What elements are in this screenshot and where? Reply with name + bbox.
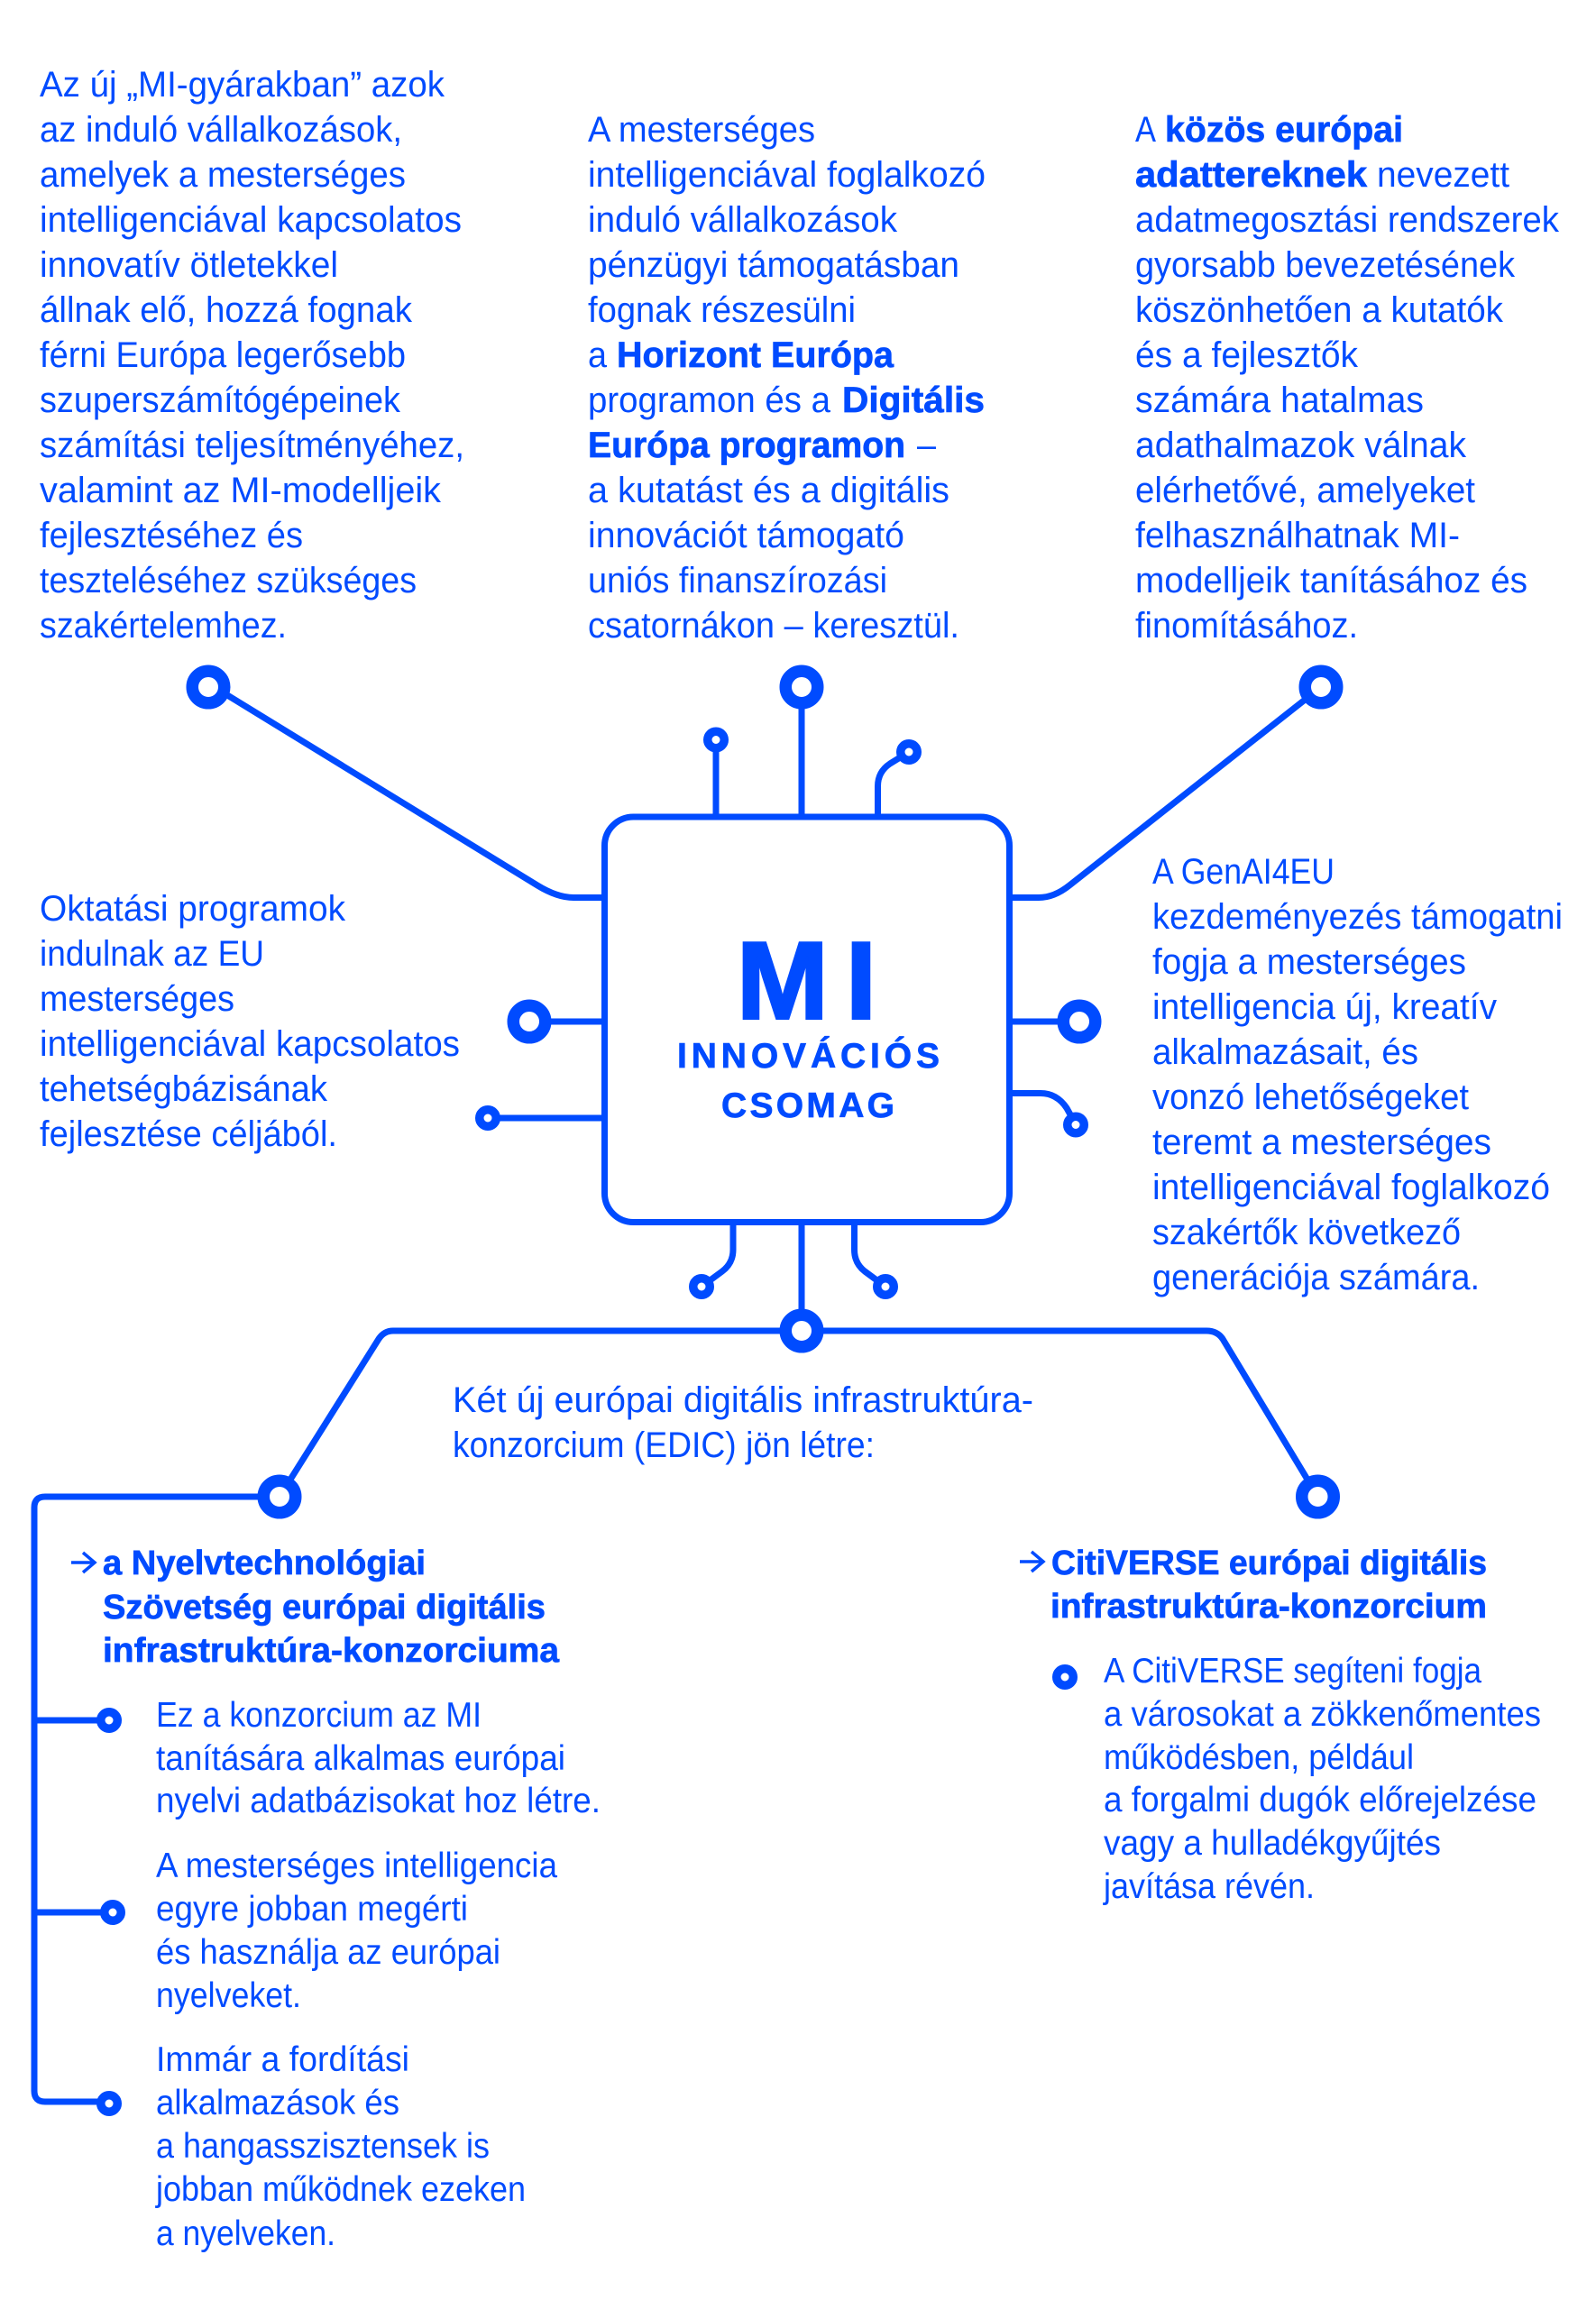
text block: funding for start-ups: a kutatást és a digitális <box>588 471 949 510</box>
text block: common European data spaces: számára hatalmas <box>1135 380 1424 420</box>
text block: education programmes: indulnak az EU <box>40 934 264 974</box>
text: CitiVERSE description: a forgalmi dugók előrejelzése <box>1104 1781 1536 1819</box>
text: CitiVERSE description <box>1103 1652 1541 1906</box>
text block: funding for start-ups <box>588 110 986 646</box>
text: language databases: Ez a konzorcium az MI <box>156 1696 482 1735</box>
circuit traces around the chip <box>208 683 1321 1331</box>
text block: education programmes: tehetségbázisának <box>40 1069 328 1109</box>
text block: funding for start-ups: a <box>588 335 608 375</box>
text block: common European data spaces: adattereknek <box>1135 155 1368 195</box>
text block: EDIC intro: Két új európai digitális infrastruktúra- <box>453 1380 1033 1420</box>
text: translation apps: a nyelveken. <box>156 2214 335 2253</box>
text block: common European data spaces: adatmegosztási rendszerek <box>1135 200 1560 240</box>
heading <box>1050 1544 1487 1626</box>
text: language databases: tanítására alkalmas európai <box>156 1739 565 1778</box>
text block: common European data spaces: elérhetővé, amelyeket <box>1135 471 1475 510</box>
text block: common European data spaces: felhasználhatnak MI- <box>1135 516 1460 555</box>
text: translation apps: alkalmazások és <box>156 2084 399 2122</box>
text: AI understands languages: és használja az európai <box>156 1933 500 1972</box>
text block: GenAI4EU: vonzó lehetőségeket <box>1152 1077 1469 1117</box>
text block: MI factories: Az új „MI-gyárakban” azok <box>40 65 445 105</box>
icon: arrow <box>1020 1552 1043 1572</box>
text block: funding for start-ups: – <box>917 426 937 465</box>
chip title: MI innovációs csomag: CSOMAG <box>721 1086 894 1125</box>
text: CitiVERSE description: a városokat a zökkenőmentes <box>1104 1695 1541 1734</box>
text: translation apps: jobban működnek ezeken <box>155 2170 526 2209</box>
text block: funding for start-ups: intelligenciával foglalkozó <box>588 155 986 195</box>
text block: common European data spaces: gyorsabb bevezetésének <box>1135 245 1516 285</box>
text block: GenAI4EU: szakértők következő <box>1152 1213 1461 1252</box>
text: CitiVERSE description: A CitiVERSE segíteni fogja <box>1104 1652 1482 1691</box>
text block: MI factories: férni Európa legerősebb <box>40 335 406 375</box>
text: CitiVERSE description: vagy a hulladékgyűjtés <box>1104 1824 1441 1863</box>
text block: funding for start-ups: fognak részesülni <box>588 290 856 330</box>
text block: education programmes: Oktatási programok <box>40 889 346 929</box>
panel: CitiVERSE consortium <box>1020 1544 1541 1906</box>
text block: education programmes <box>40 889 460 1154</box>
text block: funding for start-ups: A mesterséges <box>588 110 815 150</box>
text: AI understands languages <box>156 1847 558 2015</box>
text block: funding for start-ups: uniós finanszírozási <box>588 561 887 600</box>
text block: funding for start-ups: Digitális <box>842 380 985 420</box>
text block: GenAI4EU: intelligencia új, kreatív <box>1152 987 1497 1027</box>
text block: GenAI4EU: fogja a mesterséges <box>1152 942 1466 982</box>
text: translation apps <box>155 2040 526 2253</box>
text: AI understands languages: nyelveket. <box>156 1976 301 2015</box>
text: AI understands languages: A mesterséges intelligencia <box>156 1847 558 1885</box>
connector nodes: large <box>192 671 1337 1513</box>
chip title: MI innovációs csomag: INNOVÁCIÓS <box>677 1036 940 1076</box>
text block: GenAI4EU: alkalmazásait, és <box>1152 1032 1418 1072</box>
text: translation apps: Immár a fordítási <box>156 2040 409 2079</box>
text block: common European data spaces: adathalmazok válnak <box>1135 426 1467 465</box>
text block: funding for start-ups: Európa programon <box>588 426 905 465</box>
text block: common European data spaces: köszönhetően a kutatók <box>1135 290 1504 330</box>
heading: a Nyelvtechnológiai <box>103 1544 426 1582</box>
text block: GenAI4EU: A GenAI4EU <box>1152 852 1335 892</box>
text block: MI factories: amelyek a mesterséges <box>40 155 406 195</box>
chip frame <box>604 817 1010 1223</box>
text block: funding for start-ups: induló vállalkozások <box>588 200 898 240</box>
text: CitiVERSE description: javítása révén. <box>1103 1867 1315 1906</box>
text block: GenAI4EU: intelligenciával foglalkozó <box>1152 1168 1550 1207</box>
text block: funding for start-ups: pénzügyi támogatásban <box>588 245 959 285</box>
text block: MI factories: szakértelemhez. <box>40 606 287 646</box>
chip title: MI innovációs csomag: I <box>846 920 876 1042</box>
heading <box>103 1544 560 1670</box>
text block: common European data spaces: A <box>1135 110 1156 150</box>
text: AI understands languages: egyre jobban megérti <box>156 1890 468 1929</box>
text block: MI factories <box>40 65 464 646</box>
text block: MI factories: teszteléséhez szükséges <box>40 561 417 600</box>
heading: infrastruktúra-konzorcium <box>1050 1588 1487 1626</box>
text block: MI factories: innovatív ötletekkel <box>40 245 338 285</box>
text block: education programmes: intelligenciával kapcsolatos <box>40 1024 460 1064</box>
heading: CitiVERSE európai digitális <box>1051 1544 1487 1582</box>
text block: MI factories: fejlesztéséhez és <box>40 516 303 555</box>
text: CitiVERSE description: működésben, például <box>1104 1738 1414 1777</box>
text block: EDIC intro: konzorcium (EDIC) jön létre: <box>453 1425 875 1465</box>
connector nodes: small <box>101 731 1084 2112</box>
chip title: MI innovációs csomag <box>677 920 940 1125</box>
text: translation apps: a hangasszisztensek is <box>156 2127 490 2166</box>
text: language databases: nyelvi adatbázisokat hoz létre. <box>156 1782 601 1820</box>
panel: language technology consortium <box>71 1544 601 2253</box>
text block: funding for start-ups: innovációt támogató <box>588 516 904 555</box>
text block: GenAI4EU: teremt a mesterséges <box>1152 1123 1491 1162</box>
left rail <box>34 1497 280 2102</box>
text block: MI factories: valamint az MI-modelljeik <box>40 471 442 510</box>
text block: education programmes: fejlesztése céljából. <box>40 1114 337 1154</box>
text block: common European data spaces <box>1135 110 1560 646</box>
text block: common European data spaces: finomításához. <box>1135 606 1358 646</box>
text block: EDIC intro <box>453 1380 1033 1465</box>
text block: funding for start-ups: programon és a <box>588 380 831 420</box>
heading: infrastruktúra-konzorciuma <box>103 1632 560 1670</box>
text block: common European data spaces: nevezett <box>1377 155 1509 195</box>
text block: funding for start-ups: Horizont Európa <box>617 335 894 375</box>
text block: education programmes: mesterséges <box>40 979 234 1019</box>
text block: MI factories: számítási teljesítményéhez, <box>40 426 464 465</box>
text block: MI factories: az induló vállalkozások, <box>40 110 402 150</box>
text block: GenAI4EU <box>1152 852 1563 1297</box>
heading: Szövetség európai digitális <box>103 1589 546 1627</box>
text block: GenAI4EU: generációja számára. <box>1152 1258 1480 1297</box>
text block: funding for start-ups: csatornákon – keresztül. <box>588 606 959 646</box>
chip title: MI innovációs csomag: M <box>737 920 829 1042</box>
text block: MI factories: állnak elő, hozzá fognak <box>40 290 413 330</box>
text block: GenAI4EU: kezdeményezés támogatni <box>1152 897 1563 937</box>
text block: common European data spaces: közös európai <box>1165 110 1403 150</box>
text block: MI factories: szuperszámítógépeinek <box>40 380 401 420</box>
text block: common European data spaces: és a fejlesztők <box>1135 335 1359 375</box>
icon: arrow <box>71 1553 95 1572</box>
text block: MI factories: intelligenciával kapcsolatos <box>40 200 462 240</box>
trunk to EDIC branches <box>280 1331 1318 1497</box>
text: language databases <box>156 1696 601 1820</box>
text block: common European data spaces: modelljeik tanításához és <box>1135 561 1527 600</box>
